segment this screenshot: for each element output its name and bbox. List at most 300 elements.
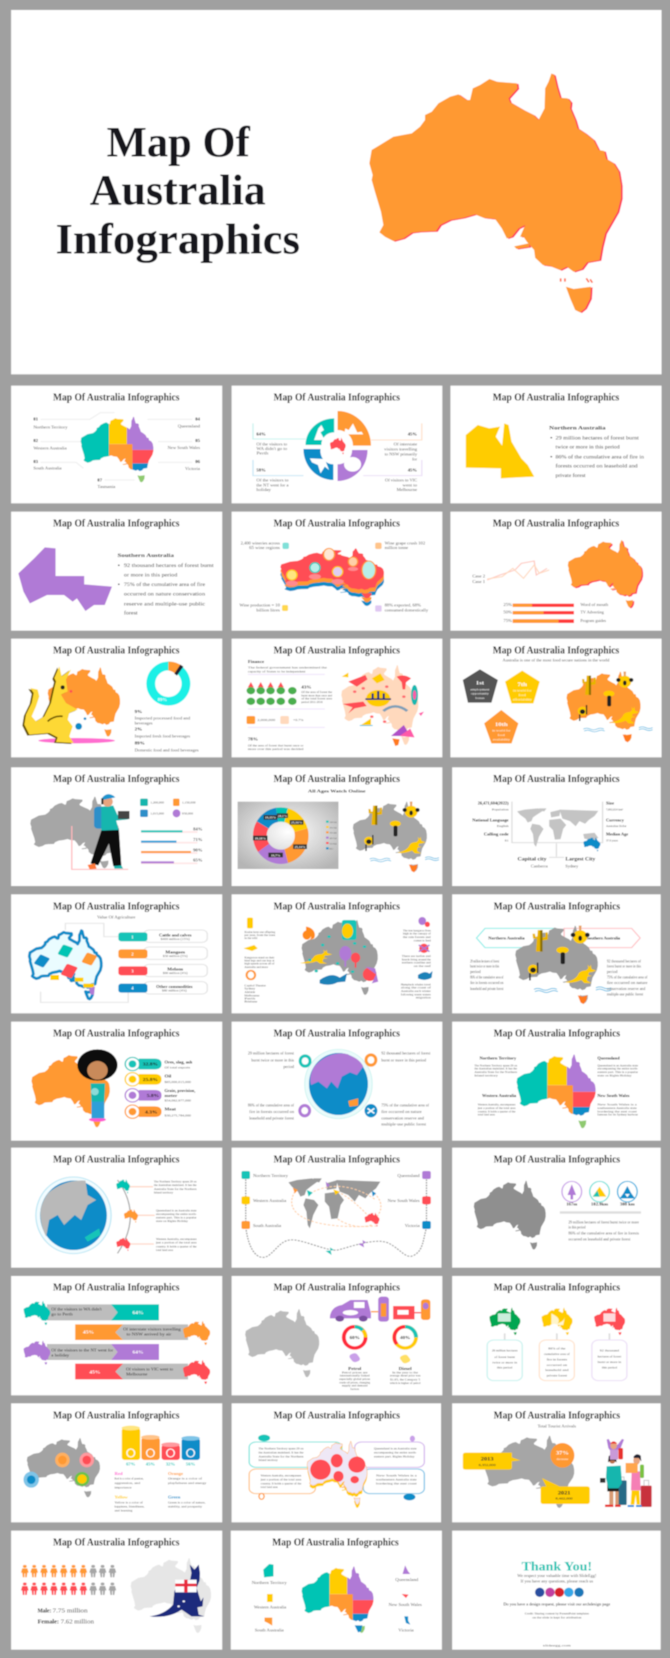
callout 2021: 2021 bbox=[558, 1491, 571, 1496]
stacked bars bbox=[503, 603, 609, 623]
stacked bars: TV Adverting bbox=[580, 610, 605, 615]
left notes: holiday bbox=[256, 488, 272, 492]
right markers and labels: Queensland bbox=[397, 1174, 420, 1179]
hero map of Australia bbox=[369, 73, 623, 313]
connector lines bbox=[253, 423, 422, 476]
colour meanings: right: Orange is a color of bbox=[168, 1477, 203, 1481]
slide title: Map Of Australia Infographics bbox=[494, 900, 620, 912]
right state labels bbox=[168, 417, 201, 471]
wine facts bbox=[239, 541, 429, 612]
colour meanings: right: Green is a color of nature, bbox=[168, 1501, 206, 1505]
cylinder chart bbox=[122, 1426, 200, 1460]
mini state labels left bbox=[252, 1581, 287, 1632]
orange map bbox=[48, 667, 120, 737]
donut value labels: 19,15% bbox=[265, 816, 276, 820]
banner 2: 45% bbox=[83, 1331, 94, 1335]
finance icons: +0.7% bbox=[293, 718, 304, 722]
bullets: occurred on leasehold and private forest bbox=[568, 1237, 631, 1241]
callout 2013 bbox=[463, 1453, 521, 1470]
export pills: 4.3% bbox=[145, 1111, 158, 1115]
right facts: 92 thousand hectares of forest bbox=[381, 1051, 431, 1056]
tree stat text: period 2011-2016 bbox=[301, 700, 323, 704]
capital and largest city: Sydney bbox=[565, 865, 579, 869]
donut legend text: Imported processed food and bbox=[135, 716, 191, 721]
left facts: 61 bbox=[505, 839, 509, 843]
left icons and text bbox=[244, 918, 276, 1003]
slide title: Map Of Australia Infographics bbox=[493, 644, 620, 656]
wine facts: 65 wine regions bbox=[249, 546, 280, 550]
right markers and labels: Victoria bbox=[405, 1224, 420, 1229]
slide title: Map Of Australia Infographics bbox=[53, 517, 180, 529]
wine facts: Wine production = 10 bbox=[239, 603, 280, 608]
left facts: English bbox=[497, 824, 509, 828]
left notes: WA didn't go to bbox=[256, 447, 287, 451]
banner 1: go to Perth bbox=[51, 1312, 73, 1317]
slide: wine regions bbox=[232, 512, 442, 631]
donut value labels: 19,18% bbox=[255, 837, 266, 840]
slide: thank you bbox=[452, 1531, 661, 1650]
box text: encompassing the entire north- bbox=[374, 1451, 417, 1455]
bullets: 29 million hectares of forest burnt twice or more bbox=[568, 1220, 639, 1225]
slide: globe and three maps bbox=[11, 1148, 222, 1268]
left notes: 58% bbox=[256, 468, 266, 473]
northern text: twice or more in this period bbox=[556, 445, 620, 450]
pentagon: 10th bbox=[484, 710, 518, 743]
right state labels: New South Wales bbox=[168, 446, 200, 450]
diesel text: average diesel price was bbox=[390, 1374, 421, 1378]
paragraphs: Western Australia, encompasses bbox=[156, 1237, 197, 1242]
banner 2: to NSW arrived by air bbox=[126, 1332, 172, 1337]
southern text: reserve and multiple-use public bbox=[124, 602, 206, 607]
right facts: conservation reserve and bbox=[381, 1116, 425, 1121]
slide: globe and forest facts bbox=[232, 1022, 442, 1141]
slide title: Map Of Australia Infographics bbox=[494, 1027, 620, 1039]
donut legend text bbox=[135, 710, 199, 752]
right facts: burnt or more in this period bbox=[381, 1058, 427, 1063]
right notes: to NSW primarily bbox=[385, 452, 418, 457]
banner 3: a holiday bbox=[51, 1353, 70, 1358]
paragraphs: country. It holds a quarter of the bbox=[156, 1245, 197, 1248]
stacked bars: 50% bbox=[503, 610, 513, 615]
finance icons bbox=[247, 716, 304, 724]
circle labels: 308 km bbox=[620, 1202, 635, 1207]
slide: finance bbox=[232, 639, 442, 757]
card 1: twice or more in bbox=[492, 1361, 517, 1364]
slide title: Map Of Australia Infographics bbox=[53, 644, 180, 656]
legend bbox=[326, 821, 337, 851]
card 2: occurred on bbox=[547, 1363, 567, 1367]
donut legend text: Imported fresh food beverages bbox=[135, 734, 191, 739]
slide: north vs south bbox=[452, 894, 661, 1013]
export labels: meter bbox=[165, 1094, 177, 1098]
slide title: Map Of Australia Infographics bbox=[274, 1409, 400, 1421]
finance heading text: The federal government has undermined the bbox=[248, 666, 328, 670]
right facts: fire occurred on nature bbox=[381, 1110, 422, 1114]
slide: cylinders and colours bbox=[11, 1403, 222, 1522]
diesel text: which is higher of petrol bbox=[390, 1381, 421, 1385]
right descriptions: New South Wales bbox=[597, 1094, 630, 1098]
legend: 65+ bbox=[329, 848, 335, 851]
paragraphs: the Australian mainland. It has the bbox=[154, 1183, 197, 1187]
donut value labels: 25,16% bbox=[291, 821, 302, 825]
mini state labels right: New South Wales bbox=[388, 1603, 422, 1607]
slide title: Map Of Australia Infographics bbox=[274, 772, 400, 785]
left markers and labels bbox=[241, 1171, 289, 1229]
slide title: Map Of Australia Infographics bbox=[53, 1281, 180, 1293]
left icons and text: Perth bbox=[244, 997, 256, 1000]
hexagon labels: Northern Australia bbox=[488, 936, 525, 940]
slide: traveller and bars bbox=[11, 767, 222, 886]
slide title: Map Of Australia Infographics bbox=[53, 1153, 180, 1165]
donut value labels: 25,14% bbox=[294, 845, 306, 849]
right notes bbox=[384, 432, 418, 492]
export labels: $30,275,784,000 bbox=[165, 1114, 191, 1118]
right notes: Of visitors to VIC bbox=[385, 478, 417, 483]
connector lines bbox=[41, 923, 128, 1002]
website: slideegg.com bbox=[543, 1644, 571, 1648]
colour meanings: right: stability, and prosperity bbox=[168, 1505, 202, 1509]
finance heading text bbox=[248, 660, 328, 674]
legend: 25-34 bbox=[329, 827, 337, 829]
slide: wildlife map bbox=[232, 894, 442, 1013]
state map bbox=[80, 417, 154, 484]
left facts: 29 million hectares of forest bbox=[248, 1051, 295, 1056]
donut legend text: 89% bbox=[135, 741, 145, 746]
progress bars: 90% bbox=[193, 848, 203, 852]
slide title: Map Of Australia Infographics bbox=[274, 391, 400, 403]
commodity rows bbox=[118, 930, 207, 994]
callout 2013: 2013 bbox=[481, 1457, 494, 1462]
slide title: Map Of Australia Infographics bbox=[274, 517, 400, 529]
crop icons bbox=[34, 944, 97, 995]
capital and largest city bbox=[518, 857, 595, 869]
right facts: 75% of the cumulative area of bbox=[381, 1103, 429, 1107]
commodity rows: Mangoes bbox=[165, 950, 185, 954]
globe bbox=[36, 1177, 111, 1254]
bullets: 86% of the cumulative area of fire in forests bbox=[568, 1231, 639, 1236]
colour meanings: left: importance bbox=[115, 1486, 132, 1489]
subtitle: Value Of Agriculture bbox=[97, 915, 136, 919]
stat icons: 950,000 bbox=[182, 812, 194, 816]
banner 3: Of the visitors to the NT went for bbox=[51, 1348, 114, 1353]
box text: Island territory bbox=[259, 1458, 278, 1462]
subtitle: Australia is one of the most food secure nations in the world bbox=[503, 658, 610, 662]
orange circle stat: 37% bbox=[556, 1451, 569, 1456]
box text: country. It holds a quarter of the bbox=[261, 1482, 302, 1485]
finance heading text: Finance bbox=[248, 660, 264, 664]
left descriptions: The Northern Territory spans 29 on bbox=[474, 1064, 518, 1067]
wine facts: 2,400 wineries across bbox=[241, 541, 280, 546]
export pills: 32.8% bbox=[143, 1063, 158, 1067]
slide: Southern Australia bbox=[11, 512, 222, 631]
petrol donut bbox=[342, 1325, 368, 1350]
commodity rows: 3 bbox=[131, 969, 134, 973]
flag kangaroo bbox=[150, 1565, 204, 1617]
left state labels bbox=[33, 417, 69, 471]
right descriptions: New South Wales is a bbox=[597, 1103, 638, 1107]
donut legend text: 9% bbox=[135, 710, 143, 714]
paragraphs: total land area bbox=[156, 1248, 174, 1252]
peach illustrated map bbox=[341, 665, 424, 746]
box text: southeastern Australia state bbox=[376, 1478, 417, 1482]
petrol text: Petrol prices are bbox=[342, 1371, 368, 1374]
right state labels: Queensland bbox=[178, 424, 201, 429]
left state labels: 02 bbox=[33, 439, 38, 443]
left icons and text: Adelaide bbox=[244, 990, 256, 994]
Australia highlight bbox=[583, 837, 600, 851]
gray map bbox=[474, 1181, 546, 1250]
line chart: Case 1 bbox=[472, 580, 485, 584]
left bullets bbox=[470, 959, 504, 991]
purple pump bbox=[371, 1297, 389, 1322]
banner 2: Of interstate visitors travelling bbox=[123, 1327, 181, 1331]
circle labels: 102.9km bbox=[591, 1202, 609, 1207]
pentagon: 1st: employment bbox=[470, 688, 490, 691]
callout 2013: 6,352,000 bbox=[479, 1463, 496, 1468]
banner 4: 45% bbox=[89, 1371, 100, 1375]
colour meanings: left bbox=[115, 1472, 145, 1513]
gray map bbox=[484, 1436, 574, 1508]
stacked bars: 75% bbox=[503, 619, 513, 623]
right notes: 45% bbox=[408, 468, 417, 473]
right icons and text: the rain forests and bbox=[403, 935, 431, 939]
box text: total land area bbox=[261, 1485, 278, 1489]
finance icons: 2,000,000 bbox=[257, 718, 276, 723]
left icons and text: hind legs and can hop at bbox=[244, 959, 275, 963]
left notes: Perth bbox=[256, 451, 270, 456]
southern text: Southern Australia bbox=[118, 554, 174, 559]
right state labels: 06 bbox=[195, 460, 200, 464]
connector lines bbox=[41, 413, 192, 480]
box text: bordering the east coast bbox=[376, 1482, 417, 1485]
orange map with fauna bbox=[567, 672, 653, 742]
card 2: leasehold and bbox=[545, 1368, 569, 1372]
pentagon: 10th: in world for bbox=[492, 729, 511, 733]
card 1: 29 million hectares bbox=[492, 1349, 518, 1353]
right icons and text: northern coastline and bbox=[402, 961, 431, 965]
pentagon: 7th: affordability bbox=[513, 698, 532, 701]
diesel text bbox=[390, 1367, 421, 1385]
commodity rows: Melons bbox=[167, 967, 183, 971]
Tasmania in blue bbox=[355, 1625, 362, 1632]
orange circle stat bbox=[550, 1443, 574, 1468]
left facts: National Language bbox=[472, 818, 509, 822]
donut value labels: 19,7% bbox=[271, 854, 280, 857]
card 2: cumulative area of bbox=[544, 1352, 570, 1356]
box text: Australia State for the Northern bbox=[259, 1455, 304, 1458]
slide: petrol and diesel bbox=[232, 1276, 442, 1395]
pentagon: 7th bbox=[505, 671, 540, 703]
banner 1 bbox=[24, 1301, 159, 1325]
left facts: Calling code bbox=[484, 832, 509, 836]
population text bbox=[38, 1606, 94, 1625]
box text: Western Australia, encompasses bbox=[261, 1474, 302, 1478]
commodity rows: $400 million (15%) bbox=[161, 937, 190, 941]
pentagon: 10th: food bbox=[498, 733, 505, 737]
left descriptions bbox=[474, 1056, 518, 1117]
outline boxes bbox=[249, 1442, 424, 1494]
right facts bbox=[381, 1051, 431, 1127]
capital and largest city: Capital city bbox=[518, 857, 547, 862]
cylinder values: 56% bbox=[186, 1462, 195, 1467]
chart panel bbox=[238, 802, 338, 869]
commodity rows: Other commodities bbox=[156, 985, 193, 989]
circle glyphs bbox=[568, 1184, 635, 1199]
box corner icons bbox=[258, 1435, 415, 1500]
box text: eastern part. Rights Holiday bbox=[374, 1455, 415, 1458]
northern region shape bbox=[466, 423, 534, 478]
commodity rows: 2 bbox=[131, 952, 134, 956]
gray map bbox=[245, 1309, 319, 1377]
fuel icons bbox=[348, 1352, 411, 1364]
progress bars: 84% bbox=[193, 827, 203, 831]
gray map bbox=[30, 797, 119, 868]
left state labels: South Australia bbox=[33, 466, 62, 471]
donut value labels: 28,1% bbox=[278, 814, 287, 818]
credit lines: Credit: Sharing content by PresentPoint templates bbox=[525, 1612, 590, 1616]
hexagon labels bbox=[476, 928, 640, 948]
frame lines bbox=[512, 802, 603, 857]
three maps bbox=[489, 1308, 625, 1335]
slide: arrow banners bbox=[11, 1276, 222, 1395]
card 2: private forest bbox=[547, 1374, 568, 1378]
slide title: Map Of Australia Infographics bbox=[494, 1409, 620, 1421]
circle labels bbox=[566, 1202, 635, 1207]
right markers and labels: New South Wales bbox=[388, 1199, 420, 1204]
southern text: 92 thousand hectares of forest burnt bbox=[124, 563, 214, 569]
slide: population pictogram and flag kangaroo bbox=[11, 1531, 222, 1650]
wine facts: consumed domestically bbox=[385, 608, 429, 612]
pentagon: 7th: in world for bbox=[513, 689, 532, 693]
slide: all ages donut bbox=[232, 767, 442, 886]
donut segments bbox=[253, 807, 309, 864]
connector lines bbox=[129, 1187, 155, 1244]
world map bbox=[288, 1178, 380, 1228]
right bullets bbox=[607, 959, 648, 997]
left facts: burnt twice or more in this bbox=[251, 1058, 294, 1062]
pink axis bbox=[72, 826, 128, 869]
paragraphs: Australia State for the Northern bbox=[154, 1187, 197, 1191]
banner 4: Of visitors to VIC went to bbox=[126, 1367, 174, 1371]
slide: three maps with cards bbox=[452, 1276, 661, 1395]
commodity rows: 1 bbox=[131, 935, 134, 939]
left descriptions: the Australian mainland. It has the bbox=[474, 1067, 518, 1071]
progress bars: 71% bbox=[193, 838, 203, 842]
slide: kangaroo and donut bbox=[11, 639, 222, 757]
traveller figure bbox=[88, 794, 129, 869]
slide title: Map Of Australia Infographics bbox=[274, 644, 400, 656]
pentagon: 10th: availability bbox=[493, 738, 510, 741]
colour meanings: right: playfulness and energy bbox=[168, 1481, 207, 1485]
kangaroo with shadow and gear bbox=[22, 666, 115, 744]
legend: 45-54 bbox=[329, 837, 337, 840]
stat icons: 1,015,000 bbox=[150, 812, 165, 816]
card 2 bbox=[539, 1340, 574, 1381]
northern text: forests occurred on leasehold and bbox=[556, 463, 638, 469]
petrol text: crude oil prices, changing bbox=[339, 1381, 371, 1385]
map pins bbox=[286, 548, 376, 586]
dashed route curve bbox=[246, 1179, 426, 1257]
petrol text: internationally linked bbox=[340, 1374, 370, 1378]
stat icons bbox=[140, 799, 196, 817]
left facts: 26,471,604(2022) bbox=[478, 801, 509, 806]
mini state labels right: Queensland bbox=[395, 1578, 419, 1582]
gray map bbox=[27, 1438, 100, 1497]
rows 5 and 6 bbox=[11, 894, 661, 1141]
legend: 35-44 bbox=[329, 832, 337, 835]
callout 2021 bbox=[541, 1478, 590, 1504]
right icons and text bbox=[401, 917, 432, 999]
pentagon: 7th: food bbox=[519, 693, 526, 697]
right icons and text: comes to feed bbox=[414, 939, 431, 942]
right markers and labels bbox=[388, 1171, 431, 1229]
rows 9 and 10 bbox=[11, 1403, 661, 1650]
commodity rows: Cattle and calves bbox=[159, 933, 192, 937]
diesel text: $1.65, the Category 5 bbox=[390, 1378, 421, 1382]
progress bars bbox=[141, 827, 203, 863]
world map bbox=[517, 808, 598, 847]
card 2: 86% of the bbox=[548, 1347, 566, 1350]
left facts: Population bbox=[492, 808, 509, 811]
right bullets: 75% of the cumulative area of bbox=[607, 975, 648, 980]
slide: girl and export pills bbox=[11, 1022, 222, 1141]
thank you message: We respect your valuable time with SlideEgg! bbox=[517, 1574, 596, 1578]
right descriptions: encompassing the entire north- bbox=[597, 1067, 638, 1071]
right facts: 37.9 years bbox=[606, 839, 618, 843]
left icons and text: Brisbane bbox=[244, 1000, 258, 1003]
state map bbox=[516, 1054, 596, 1130]
banner 3: 64% bbox=[132, 1351, 144, 1355]
tree stat text: burnt more than once and bbox=[301, 694, 333, 697]
line chart: Case 2 bbox=[472, 574, 485, 578]
banner 3 bbox=[24, 1341, 159, 1365]
colour meanings: left: Red bbox=[115, 1472, 123, 1476]
mini maps bbox=[116, 1179, 138, 1251]
export labels: Ores, slag, ash bbox=[165, 1060, 193, 1065]
centre map bbox=[307, 1441, 367, 1508]
left icons and text: Koalas have one offspring bbox=[244, 930, 276, 934]
card 1 bbox=[487, 1340, 522, 1381]
tree stat text bbox=[301, 685, 333, 704]
slide title: Map Of Australia Infographics bbox=[53, 1536, 180, 1548]
right descriptions: Queensland bbox=[597, 1056, 620, 1061]
Tasmania label bbox=[97, 478, 116, 489]
flight routes bbox=[292, 1186, 381, 1227]
population text: Male: bbox=[38, 1606, 51, 1614]
stat icons: 1,200,000 bbox=[150, 801, 165, 805]
left facts bbox=[472, 801, 509, 843]
petrol text bbox=[339, 1367, 371, 1391]
left notes: Of the visitors to bbox=[256, 478, 288, 483]
card 3: hectares of forest bbox=[598, 1355, 622, 1359]
right facts: multiple-use public forest bbox=[381, 1122, 427, 1127]
right icons and text: lizards living around the bbox=[402, 958, 431, 961]
hero slide bbox=[11, 10, 662, 374]
export labels: Of total exports bbox=[165, 1066, 191, 1070]
banner 4 bbox=[75, 1360, 210, 1384]
paragraphs: eastern part. This is a popular bbox=[156, 1216, 197, 1219]
left facts bbox=[248, 1051, 295, 1121]
right icons and text: high in the canopy of bbox=[403, 932, 432, 936]
left descriptions: Australia State for the Northern bbox=[474, 1070, 518, 1074]
northern text: 86% of the cumulative area of fire in bbox=[556, 454, 644, 460]
export labels: $54,062,977,000 bbox=[165, 1099, 191, 1103]
credit lines bbox=[525, 1612, 590, 1619]
thank you message: If you have any questions, please reach us bbox=[521, 1579, 594, 1584]
gray map with fauna bbox=[515, 926, 611, 1004]
donut chart bbox=[146, 662, 190, 706]
right descriptions: famous for its Sydney harbour bbox=[597, 1113, 638, 1117]
